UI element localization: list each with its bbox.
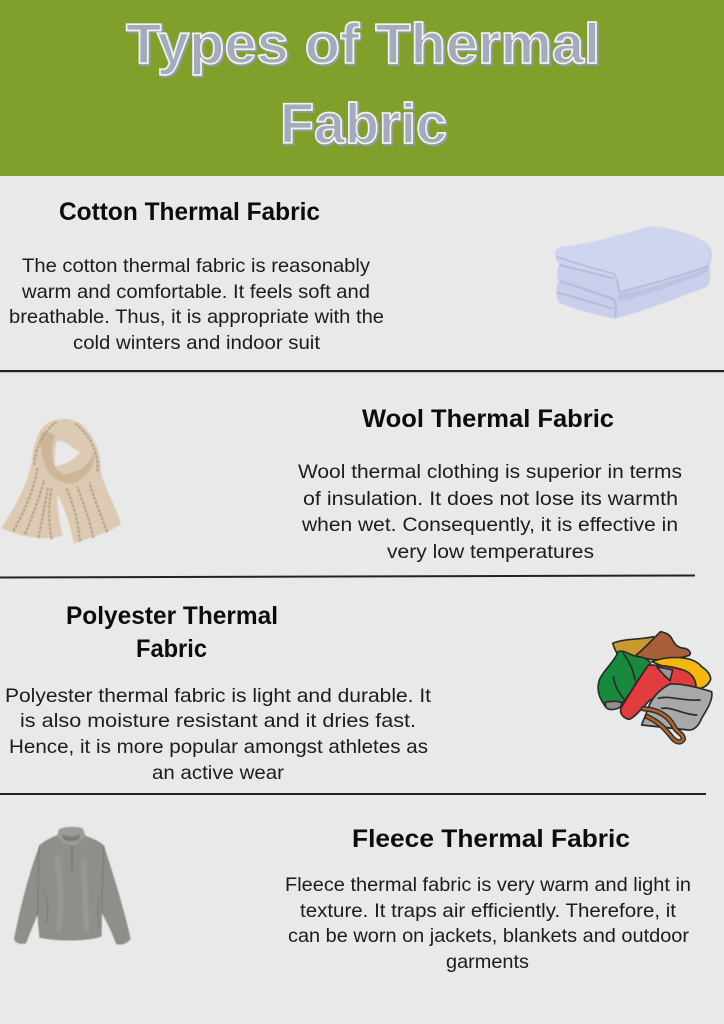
heading: fleece: Fleece Thermal Fabric bbox=[352, 825, 630, 853]
icon: folded towels bbox=[555, 226, 712, 319]
divider line 2 bbox=[0, 576, 695, 578]
icon: knitted scarf bbox=[1, 419, 121, 544]
icon: grey fleece pullover bbox=[14, 827, 131, 945]
text block: fleece description: garments bbox=[446, 951, 529, 973]
text block: cotton description: warm and comfortable. It feels soft and bbox=[21, 281, 370, 303]
text block: cotton description: cold winters and indoor suit bbox=[73, 332, 321, 354]
header banner bbox=[0, 0, 724, 176]
text block: polyester description: an active wear bbox=[152, 762, 285, 784]
text block: fleece description bbox=[285, 874, 691, 973]
text block: polyester description: Hence, it is more popular amongst athletes as bbox=[9, 736, 428, 758]
text block: polyester description: is also moisture resistant and it dries fast. bbox=[20, 710, 416, 732]
title bbox=[126, 12, 602, 158]
text block: wool description: very low temperatures bbox=[387, 541, 594, 563]
text block: fleece description: can be worn on jackets, blankets and outdoor bbox=[288, 925, 690, 947]
heading: polyester bbox=[66, 602, 278, 663]
title: Types of Thermal bbox=[128, 14, 602, 78]
text block: wool description bbox=[298, 461, 682, 563]
text block: wool description: when wet. Consequently, it is effective in bbox=[301, 514, 678, 536]
heading: cotton: Cotton Thermal Fabric bbox=[59, 198, 320, 226]
panel: wool thermal fabric bbox=[1, 405, 682, 563]
text block: cotton description: breathable. Thus, it is appropriate with the bbox=[9, 306, 384, 328]
panel: fleece thermal fabric bbox=[14, 825, 691, 973]
title: Fabric bbox=[280, 92, 447, 156]
title: Types of Thermal bbox=[126, 12, 600, 76]
divider line 3 bbox=[0, 793, 706, 795]
text block: polyester description: Polyester thermal fabric is light and durable. It bbox=[5, 685, 432, 707]
text block: cotton description: The cotton thermal fabric is reasonably bbox=[22, 255, 370, 277]
title: Fabric bbox=[282, 94, 448, 158]
text block: polyester description bbox=[5, 685, 432, 784]
panel: polyester thermal fabric bbox=[5, 602, 712, 784]
text block: fleece description: texture. It traps air efficiently. Therefore, it bbox=[300, 900, 677, 922]
divider line 1 bbox=[0, 370, 724, 372]
text block: cotton description bbox=[9, 255, 384, 354]
heading: polyester: Fabric bbox=[136, 635, 207, 663]
panel: cotton thermal fabric bbox=[9, 198, 712, 354]
text block: wool description: Wool thermal clothing is superior in terms bbox=[298, 461, 682, 483]
heading: polyester: Polyester Thermal bbox=[66, 602, 278, 630]
heading: wool: Wool Thermal Fabric bbox=[362, 405, 614, 433]
text block: fleece description: Fleece thermal fabric is very warm and light in bbox=[285, 874, 691, 896]
icon: pile of clothes bbox=[598, 632, 712, 742]
title: Fabric bbox=[280, 92, 447, 156]
title: Types of Thermal bbox=[126, 12, 600, 76]
text block: wool description: of insulation. It does not lose its warmth bbox=[303, 488, 678, 510]
